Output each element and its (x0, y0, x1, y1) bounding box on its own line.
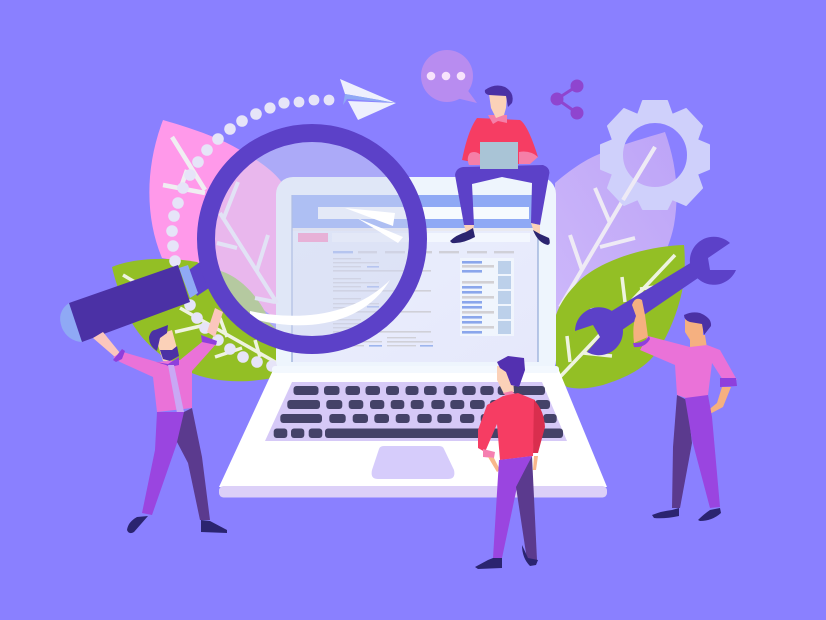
gear (601, 101, 709, 209)
laptop base (219, 366, 607, 498)
speech bubble (421, 50, 477, 103)
person holding magnifier (93, 308, 227, 533)
gear leaf vein (623, 147, 655, 200)
right green leaf (556, 245, 685, 388)
pink leaf (149, 120, 292, 330)
dotted trail (166, 95, 334, 372)
magnifier lens (212, 139, 412, 339)
paper plane (340, 79, 396, 120)
person standing in front of laptop (475, 356, 545, 569)
laptop lid (276, 177, 556, 377)
share icon (550, 80, 584, 120)
lavender leaf (555, 132, 677, 330)
wrench (575, 237, 736, 355)
illustration (60, 50, 737, 569)
magnifier (60, 133, 418, 345)
person on top with laptop (450, 86, 550, 245)
trackpad (372, 446, 454, 479)
laptop screen (292, 195, 538, 362)
person holding wrench (632, 299, 737, 521)
left green leaf (112, 259, 277, 381)
keyboard (265, 382, 567, 441)
